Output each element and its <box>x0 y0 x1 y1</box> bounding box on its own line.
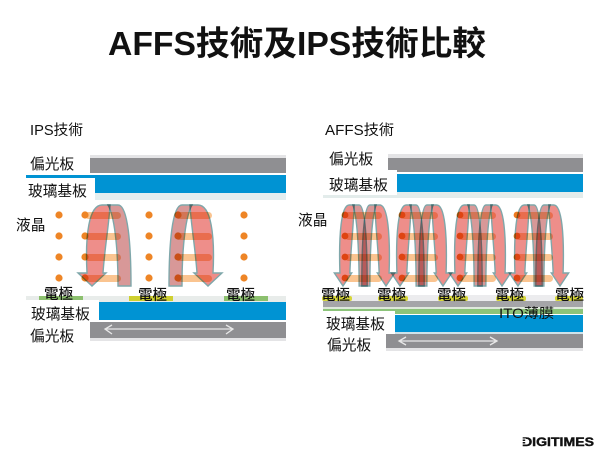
logo: DigiTimes: DIGITIMES <box>522 435 594 449</box>
labels: electrodes: 電極 <box>44 286 73 303</box>
arrow: field arc left <box>78 205 131 286</box>
bottom glass substrate <box>320 311 583 335</box>
labels: electrodes <box>44 286 255 304</box>
label: top polarizer: 偏光板 <box>30 156 74 173</box>
top polarizer <box>388 154 583 172</box>
title: AFFS技術及IPS技術比較 <box>108 25 486 63</box>
bottom polarizer with arrow <box>90 322 286 341</box>
label: ITO film: ITO薄膜 <box>499 306 554 321</box>
labels: electrodes: 電極 <box>437 287 466 304</box>
arrow: field arc right <box>169 205 222 286</box>
bottom polarizer with arrow <box>386 334 583 351</box>
labels: electrodes <box>321 287 584 304</box>
label: top glass: 玻璃基板 <box>28 183 87 200</box>
label: top polarizer: 偏光板 <box>329 151 373 168</box>
electrode and ITO layers <box>322 295 583 314</box>
label: bottom glass: 玻璃基板 <box>326 316 385 333</box>
panel: AFFS technology <box>298 122 584 354</box>
arrows: field arcs <box>334 205 569 286</box>
labels: electrodes: 電極 <box>555 287 584 304</box>
panel: IPS technology <box>16 122 286 345</box>
labels: electrodes: 電極 <box>226 287 255 304</box>
labels: electrodes: 電極 <box>321 287 350 304</box>
label: bottom polarizer: 偏光板 <box>30 328 74 345</box>
labels: electrodes: 電極 <box>377 287 406 304</box>
bottom glass substrate <box>26 300 286 324</box>
labels: electrodes: 電極 <box>495 287 524 304</box>
heading: IPS: IPS技術 <box>30 122 83 139</box>
labels: electrodes: 電極 <box>138 287 167 304</box>
liquid crystal molecules <box>342 212 553 282</box>
top polarizer <box>90 155 286 173</box>
top glass substrate <box>26 175 286 201</box>
liquid crystal molecules <box>55 211 248 282</box>
label: bottom polarizer: 偏光板 <box>327 337 371 354</box>
label: bottom glass: 玻璃基板 <box>31 306 90 323</box>
label: liquid crystal: 液晶 <box>16 217 45 234</box>
label: top glass: 玻璃基板 <box>329 177 388 194</box>
electrode layer <box>26 296 286 302</box>
label: liquid crystal: 液晶 <box>298 212 327 229</box>
top glass substrate <box>323 170 583 198</box>
heading: AFFS: AFFS技術 <box>325 122 394 139</box>
